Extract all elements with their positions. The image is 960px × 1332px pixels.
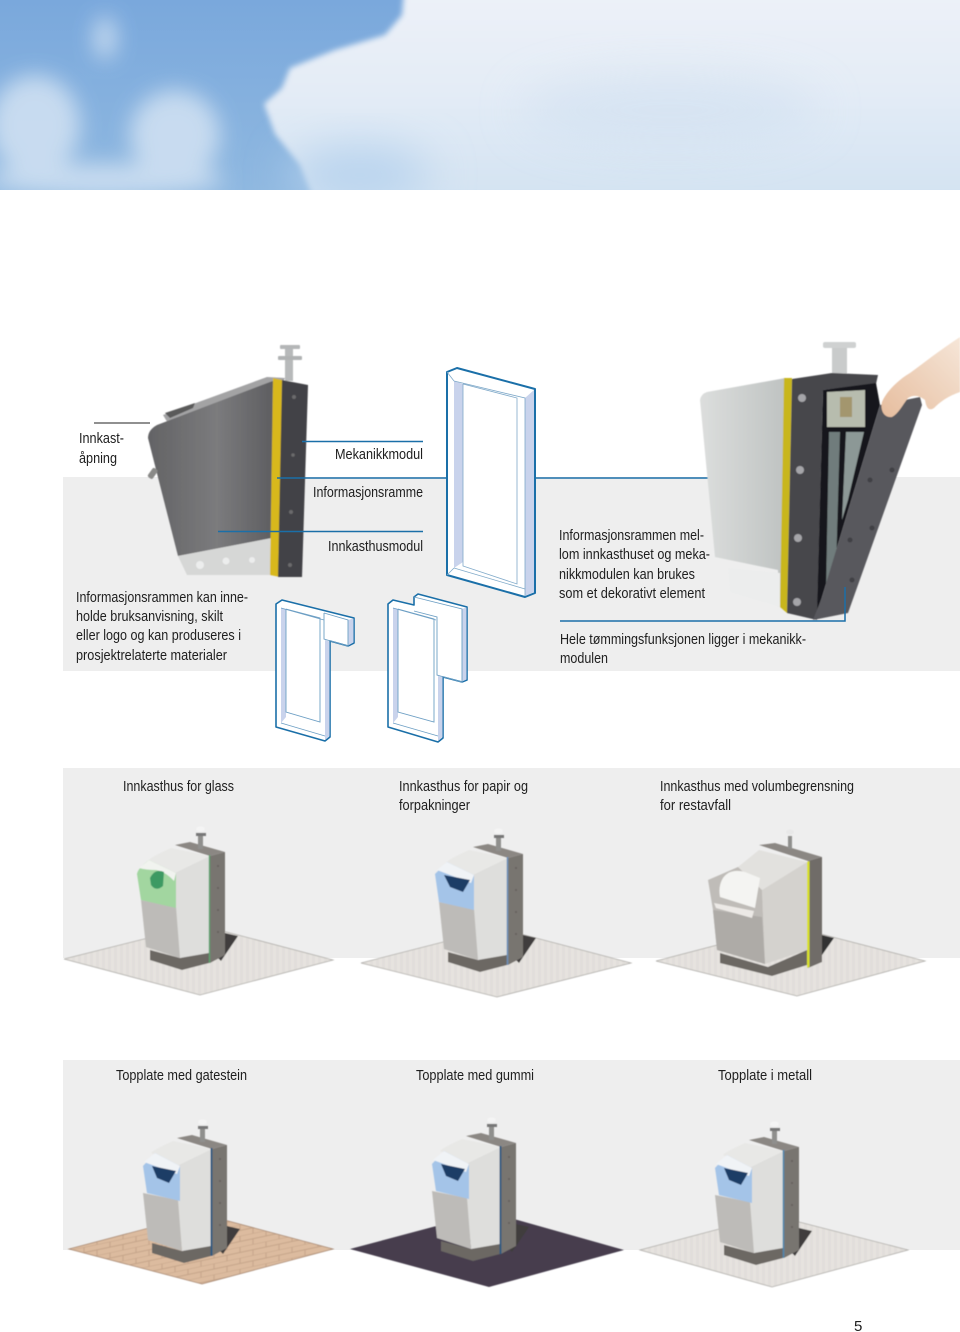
diagram: frame with large module — [388, 594, 467, 742]
heading: metal top plate: Topplate i metall — [718, 1068, 812, 1084]
callout line: Innkaståpning — [94, 422, 150, 424]
unit: metal plate — [640, 1122, 908, 1287]
unit: volume limited residual waste housing on plate — [656, 830, 925, 996]
heading: residual waste housing: Innkasthus med volumbegrensning — [660, 779, 854, 795]
label: Innkaståpning: åpning — [79, 451, 117, 467]
unit: rubber plate — [350, 1118, 624, 1287]
text: emptying function note: Hele tømmingsfunksjonen ligger i mekanikk- — [560, 632, 806, 648]
panel: grey band behind top plate variants — [63, 1060, 960, 1250]
heading: paving stone top plate: Topplate med gatestein — [116, 1068, 247, 1084]
unit: glass housing on plate — [64, 826, 333, 995]
text: emptying function note: modulen — [560, 651, 608, 667]
diagram: frame with small module — [276, 600, 354, 741]
callout line: Mekanikkmodul — [302, 440, 423, 442]
text: decorative frame note: lom innkasthuset og meka- — [559, 547, 710, 563]
panel: grey band behind housing variants — [63, 768, 960, 958]
text: information frame content: eller logo og kan produseres i — [76, 628, 241, 644]
callout line: emptying function — [560, 587, 845, 621]
photo: closed unit side view — [147, 345, 308, 577]
panel: grey band behind module diagram — [63, 477, 960, 671]
heading: residual waste housing: for restavfall — [660, 798, 731, 814]
heading: paper housing: Innkasthus for papir og — [399, 779, 528, 795]
photo: opened unit with hand — [700, 337, 960, 620]
text: decorative frame note: som et dekorativt element — [559, 586, 705, 602]
text: information frame content: prosjektrelaterte materialer — [76, 648, 227, 664]
diagram: large information frame — [447, 368, 535, 597]
text: decorative frame note: nikkmodulen kan brukes — [559, 567, 695, 583]
heading: paper housing: forpakninger — [399, 798, 470, 814]
heading: glass housing: Innkasthus for glass — [123, 779, 234, 795]
sky photo banner — [0, 0, 960, 203]
heading: rubber top plate: Topplate med gummi — [416, 1068, 534, 1084]
icon: hand holding door — [881, 337, 960, 417]
label: Innkaståpning: Innkast- — [79, 431, 124, 447]
callout line: Informasjonsramme through large frame to right photo — [277, 477, 785, 479]
text: information frame content: Informasjonsrammen kan inne- — [76, 590, 248, 606]
callout line: Innkasthusmodul — [218, 530, 423, 532]
unit: paving stone plate — [69, 1120, 333, 1284]
text: decorative frame note: Informasjonsrammen mel- — [559, 528, 704, 544]
label: Innkasthusmodul: Innkasthusmodul — [328, 539, 423, 555]
label: Mekanikkmodul: Mekanikkmodul — [335, 447, 423, 463]
unit: paper housing on plate — [361, 828, 631, 997]
text: information frame content: holde bruksanvisning, skilt — [76, 609, 223, 625]
label: Informasjonsramme: Informasjonsramme — [313, 485, 423, 501]
